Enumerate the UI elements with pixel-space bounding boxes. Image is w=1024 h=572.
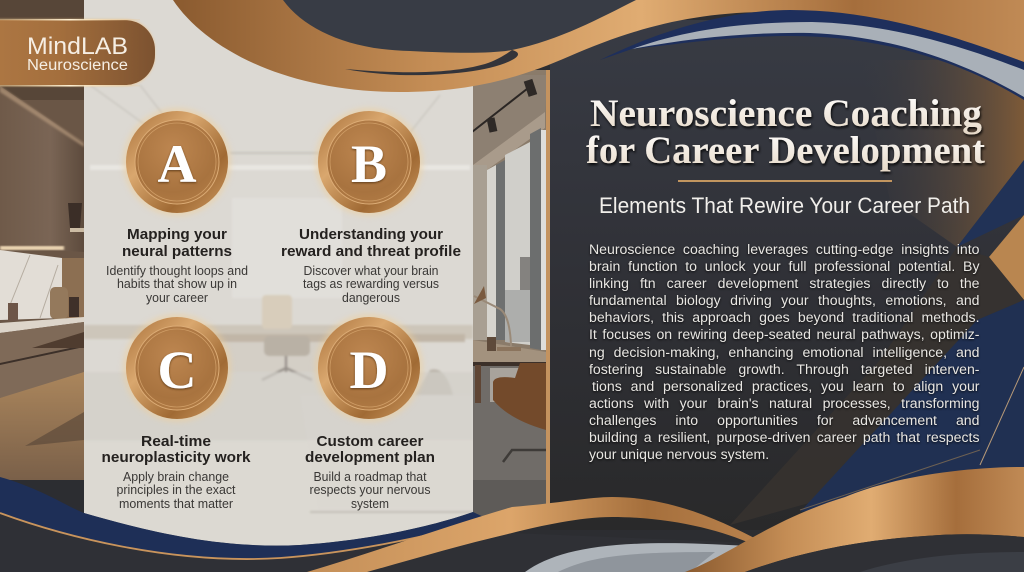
body paragraph: Neuroscience coaching leverages cutting-edge insights into xyxy=(589,241,980,257)
title xyxy=(586,92,985,172)
coin C xyxy=(123,314,231,422)
coin D: D xyxy=(350,340,388,400)
title: Neuroscience Coaching xyxy=(590,92,983,135)
text block A: Identify thought loops and xyxy=(106,264,248,278)
logo badge xyxy=(0,19,155,86)
body paragraph: building a resilient, purpose-driven career path that respects xyxy=(589,429,980,445)
text block B: Discover what your brain xyxy=(304,264,439,278)
decoration: top right navy and silver arcs xyxy=(600,10,1024,100)
background: left interior photo xyxy=(0,0,90,480)
body paragraph: brain function to unlock your full professional potential. By xyxy=(589,258,980,274)
decoration: bottom left navy wave xyxy=(0,477,490,572)
text block D: Custom career xyxy=(316,434,424,450)
body paragraph: actions with your brain's natural processes, transforming xyxy=(589,395,980,411)
logo badge: Neuroscience xyxy=(27,57,128,74)
body paragraph: challenges into opportunities for advancement and xyxy=(589,412,980,428)
body paragraph: tions and personalized practices, you learn to align your xyxy=(592,378,980,394)
coin D xyxy=(315,314,423,422)
body paragraph: behaviors, this approach goes beyond traditional methods. xyxy=(589,309,980,325)
text block A: habits that show up in xyxy=(117,277,237,291)
coin A: A xyxy=(158,134,196,194)
text block C: neuroplasticity work xyxy=(102,450,251,466)
coin B: B xyxy=(351,134,387,194)
text block C xyxy=(102,434,251,511)
title: for Career Development xyxy=(586,129,985,172)
body paragraph xyxy=(589,241,980,464)
subtitle: Elements That Rewire Your Career Path xyxy=(599,193,970,218)
text block A: Mapping your xyxy=(127,227,227,243)
text block D: Build a roadmap that xyxy=(314,470,427,484)
coin B xyxy=(315,108,423,216)
title divider xyxy=(678,180,892,182)
text block C: principles in the exact xyxy=(116,483,236,497)
background: dark content panel xyxy=(546,20,1024,530)
body paragraph: your unique nervous system. xyxy=(589,446,769,462)
body paragraph: ng decision-making, enhancing emotional intelligence, and xyxy=(589,344,980,360)
text block A: your career xyxy=(146,291,208,305)
text block D: respects your nervous xyxy=(310,483,430,497)
coin C: C xyxy=(158,340,196,400)
logo text: MindLAB: MindLAB xyxy=(27,33,128,60)
body paragraph: It focuses on rewiring deep-seated neural pathways, optimiz- xyxy=(589,326,980,342)
text block B: tags as rewarding versus xyxy=(303,277,439,291)
text block D xyxy=(305,434,435,511)
text block C: Apply brain change xyxy=(123,470,229,484)
decoration: top gold swoosh xyxy=(173,0,1024,92)
background: right interior photo xyxy=(472,70,550,520)
text block A: neural patterns xyxy=(122,244,232,260)
decoration: bottom right gold waves xyxy=(307,467,1024,572)
body paragraph: fostering sustainable growth. Through targeted interven- xyxy=(589,361,980,377)
text block B: reward and threat profile xyxy=(281,244,461,260)
text block D: development plan xyxy=(305,450,435,466)
body paragraph: fundamental biology driving your thoughts, emotions, and xyxy=(589,292,980,308)
text block C: Real-time xyxy=(141,434,211,450)
text block B xyxy=(281,227,461,305)
coin A xyxy=(123,108,231,216)
body paragraph: linking ftn career development strategies directly to the xyxy=(589,275,980,291)
text block B: Understanding your xyxy=(299,227,443,243)
text block A xyxy=(106,227,248,305)
text block B: dangerous xyxy=(342,291,400,305)
text block D: system xyxy=(351,497,389,511)
panel: elements card xyxy=(84,0,473,560)
text block C: moments that matter xyxy=(119,497,233,511)
